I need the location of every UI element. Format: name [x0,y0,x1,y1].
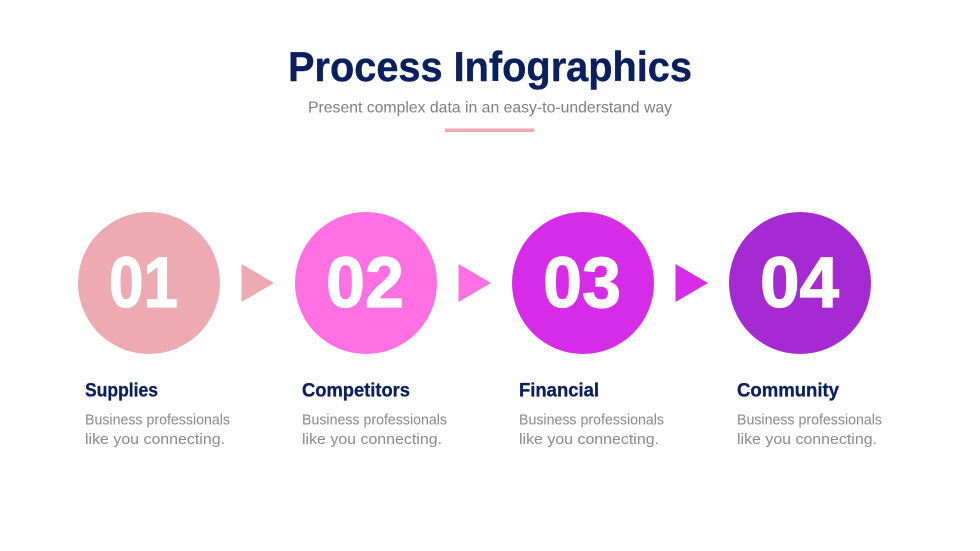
description 4: like you connecting. [737,431,877,448]
title: Process Infographics [288,43,692,90]
circle 04: 04 [760,244,840,323]
circle 02 [295,212,437,354]
description 1: Business professionals [85,412,230,428]
step 3: Financial [512,212,664,448]
step 2: Competitors [295,212,447,448]
heading: Supplies: Supplies [85,380,158,402]
circle 04 [729,212,871,354]
circle 03 [512,212,654,354]
heading: Financial: Financial [519,380,599,402]
description 2: like you connecting. [302,431,442,448]
heading: Competitors: Competitors [302,380,410,402]
description 3: Business professionals [519,412,664,428]
circle 01: 01 [109,244,178,323]
description 2: Business professionals [302,412,447,428]
description 3: like you connecting. [519,431,659,448]
circle 02: 02 [326,244,404,323]
circle 01 [78,212,220,354]
subtitle: Present complex data in an easy-to-understand way [308,100,672,116]
step 4: Community [729,212,882,448]
title underline [445,128,534,132]
arrow 3 [676,264,708,302]
arrow 2 [458,264,491,302]
circle 03: 03 [543,244,621,323]
description 4: Business professionals [737,412,882,428]
step 1: Supplies [78,212,230,448]
description 1: like you connecting. [85,431,225,448]
arrow 1 [242,264,274,302]
heading: Community: Community [737,380,839,402]
